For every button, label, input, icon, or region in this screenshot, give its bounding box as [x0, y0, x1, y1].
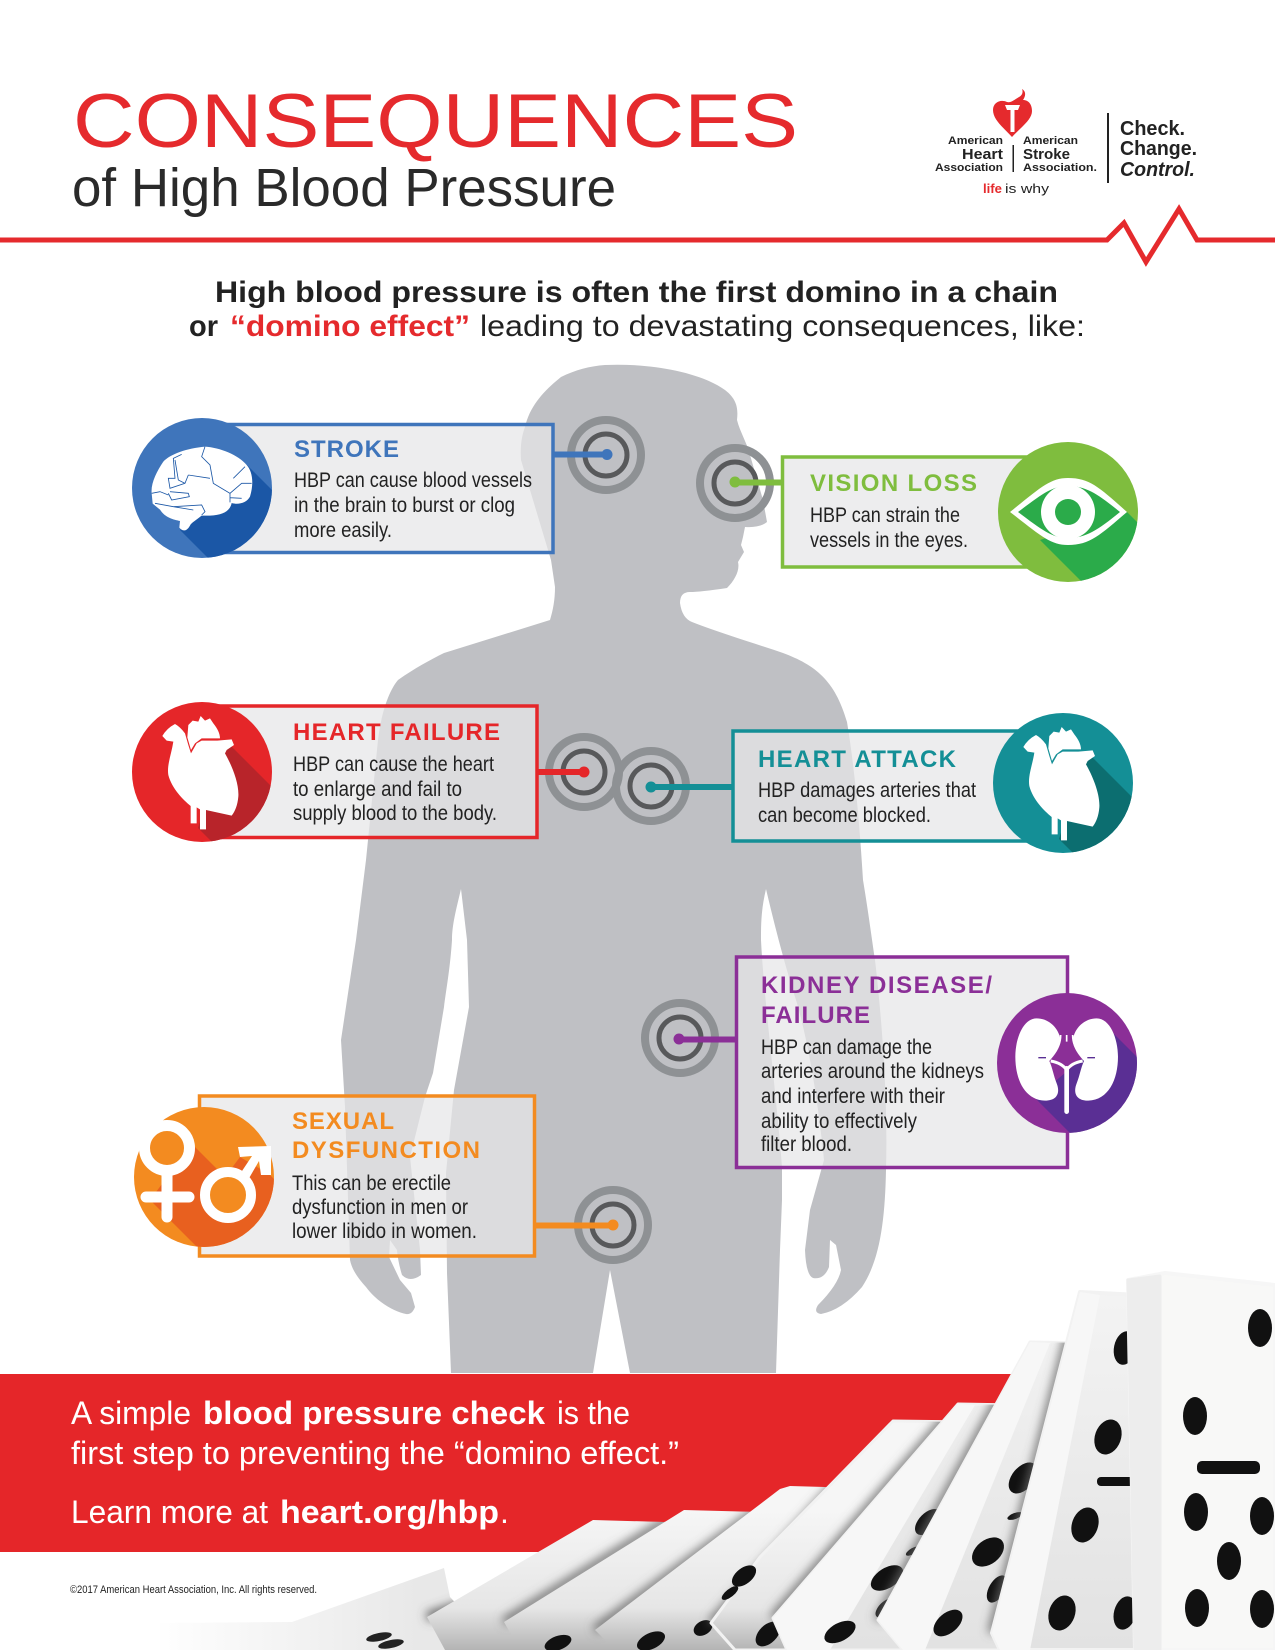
panel: stroke: [132, 416, 645, 558]
sexual dysfunction text: [292, 1108, 480, 1243]
vision connector and target: [700, 448, 783, 518]
heart attack text: can become blocked.: [758, 804, 931, 827]
vision text: [810, 470, 977, 552]
icon: brain: [132, 418, 272, 558]
vision text: vessels in the eyes.: [810, 529, 968, 552]
logo: American Heart Association, American Stroke Association: Association: [935, 162, 1003, 174]
vision text: VISION LOSS: [810, 470, 977, 497]
logo: Check. Change. Control.: Control.: [1120, 159, 1195, 181]
intro text: “domino effect”: [230, 310, 470, 343]
call-to-action text: A simple: [71, 1395, 191, 1431]
heartbeat divider line: [0, 209, 1275, 262]
panel: heart attack: [612, 713, 1133, 853]
heart failure text: HBP can cause the heart: [293, 753, 494, 776]
logo: American Heart Association, American Stroke Association: life: [983, 181, 1002, 196]
icon: gender symbols: [134, 1107, 274, 1247]
kidney text: [761, 972, 992, 1156]
kidney text: HBP can damage the: [761, 1036, 932, 1059]
icon: heart red: [132, 702, 272, 842]
panel: kidney disease: [641, 955, 1137, 1170]
stroke text: more easily.: [294, 519, 392, 542]
call-to-action text: blood pressure check: [203, 1395, 545, 1431]
logo: Check. Change. Control.: Check.: [1120, 118, 1185, 140]
sexual dysfunction text: This can be erectile: [292, 1172, 451, 1195]
call-to-action text: is the: [557, 1395, 630, 1431]
vision text: HBP can strain the: [810, 504, 960, 527]
sexual dysfunction text: DYSFUNCTION: [292, 1137, 480, 1164]
heart failure text: [293, 719, 500, 825]
sexual dysfunction text: lower libido in women.: [292, 1220, 477, 1243]
call-to-action text: [71, 1395, 679, 1530]
heart failure text: supply blood to the body.: [293, 802, 497, 825]
kidney text: arteries around the kidneys: [761, 1060, 984, 1083]
stroke text: STROKE: [294, 436, 399, 463]
intro text: High blood pressure is often the first domino in a chain: [215, 276, 1058, 309]
icon: kidneys: [997, 993, 1137, 1133]
logo: American Heart Association, American Stroke Association: Association.: [1023, 162, 1097, 174]
red call-to-action band: [0, 1374, 1275, 1552]
call-to-action text: first step to preventing the “domino effect.”: [71, 1435, 679, 1471]
icon: heart teal: [993, 713, 1133, 853]
logo: American Heart Association, American Stroke Association: American: [1023, 135, 1078, 147]
logo: American Heart Association, American Stroke Association: is why: [1005, 181, 1050, 196]
falling dominoes photo: [160, 1273, 1275, 1650]
title: of High Blood Pressure: [72, 158, 616, 218]
heart attack text: HBP damages arteries that: [758, 779, 976, 802]
heart failure connector and target: [537, 737, 619, 807]
kidney connector and target: [645, 1003, 737, 1073]
title: [72, 79, 798, 218]
kidney text: KIDNEY DISEASE/: [761, 972, 992, 999]
logo: Check. Change. Control.: [1107, 113, 1197, 183]
human body silhouette: [341, 365, 886, 1373]
stroke text: HBP can cause blood vessels: [294, 469, 532, 492]
panel: heart failure: [132, 702, 623, 842]
copyright: ©2017 American Heart Association, Inc. All rights reserved.: [70, 1584, 317, 1596]
stroke connector and target: [553, 420, 641, 490]
sexual dysfunction text: SEXUAL: [292, 1108, 394, 1135]
heart failure text: HEART FAILURE: [293, 719, 500, 746]
panel: vision loss: [696, 442, 1138, 582]
logo: Check. Change. Control.: Change.: [1120, 138, 1197, 160]
stroke text: in the brain to burst or clog: [294, 494, 515, 517]
heart failure text: to enlarge and fail to: [293, 778, 462, 801]
call-to-action text: Learn more at: [71, 1494, 268, 1530]
stroke text: [294, 436, 532, 542]
intro text: [189, 276, 1085, 343]
heart attack text: [758, 746, 976, 827]
sexual dysfunction connector and target: [534, 1190, 648, 1260]
intro text: leading to devastating consequences, like:: [480, 310, 1085, 343]
call-to-action text: .: [500, 1494, 509, 1530]
logo: American Heart Association, American Stroke Association: [935, 89, 1097, 196]
title: CONSEQUENCES: [73, 79, 798, 164]
call-to-action text: heart.org/hbp: [280, 1494, 499, 1530]
logo: American Heart Association, American Stroke Association: Stroke: [1023, 146, 1070, 163]
icon: eye: [998, 442, 1138, 582]
kidney text: and interfere with their: [761, 1085, 945, 1108]
intro text: or: [189, 310, 218, 343]
sexual dysfunction text: dysfunction in men or: [292, 1196, 468, 1219]
heart attack text: HEART ATTACK: [758, 746, 957, 773]
panel: sexual dysfunction: [134, 1096, 648, 1270]
heart attack connector and target: [616, 751, 733, 821]
kidney text: FAILURE: [761, 1002, 870, 1029]
logo: American Heart Association, American Stroke Association: American: [948, 135, 1003, 147]
logo: American Heart Association, American Stroke Association: Heart: [962, 146, 1003, 163]
kidney text: filter blood.: [761, 1133, 852, 1156]
kidney text: ability to effectively: [761, 1110, 917, 1133]
